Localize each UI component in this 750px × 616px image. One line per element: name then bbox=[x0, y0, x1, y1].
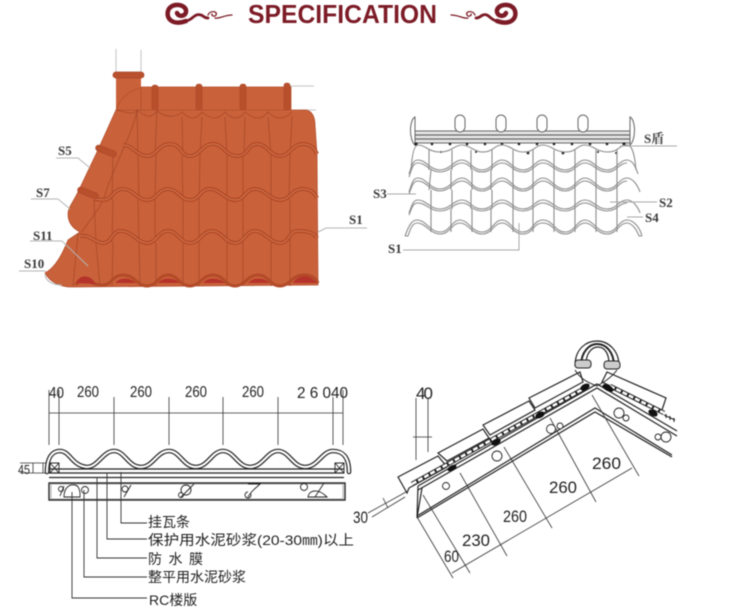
dimension lines bbox=[20, 390, 343, 473]
callout: S shield: S盾 bbox=[644, 131, 664, 146]
callout: S3: S3 bbox=[373, 186, 387, 201]
dimension labels: 260 bbox=[242, 384, 264, 401]
slab aggregate marks bbox=[58, 483, 327, 498]
hatched batten strip bbox=[412, 386, 675, 484]
callout: S5 bbox=[56, 143, 90, 168]
dimension labels: 260 bbox=[549, 478, 577, 497]
callout: S7: S7 bbox=[36, 185, 50, 200]
tile seams bbox=[73, 110, 292, 286]
dimension labels: 60 bbox=[444, 547, 459, 566]
dimension labels: 260 bbox=[185, 384, 207, 401]
dimension labels: 260 bbox=[503, 507, 527, 526]
material legend: 整平用水泥砂浆 bbox=[148, 569, 246, 585]
icon: right cloud swirl bbox=[451, 5, 515, 23]
material legend bbox=[148, 514, 354, 608]
slab aggregate marks bbox=[442, 408, 671, 490]
callout: S5: S5 bbox=[58, 143, 72, 158]
dimension labels: 260 bbox=[77, 384, 99, 401]
callout: S1: S1 bbox=[388, 241, 402, 256]
eave scallops bbox=[76, 276, 317, 284]
roof slab layers bbox=[49, 469, 345, 500]
roof tile body bbox=[45, 110, 318, 287]
panel: cross section with dimensions bbox=[18, 384, 354, 608]
callout: S shield bbox=[620, 131, 677, 146]
callout: S1 bbox=[318, 212, 367, 232]
callout: S4: S4 bbox=[645, 210, 659, 225]
callout: S10 bbox=[19, 256, 62, 285]
material legend: 保护用水泥砂浆(20-30㎜)以上 bbox=[148, 532, 354, 548]
panel: line drawing of tile layout bbox=[373, 115, 677, 256]
callout: S2: S2 bbox=[659, 195, 673, 210]
dimension labels: 30 bbox=[353, 508, 368, 527]
roof slab lines bbox=[417, 384, 677, 518]
leader lines bbox=[72, 472, 147, 598]
battens bbox=[50, 463, 344, 473]
callout: S11: S11 bbox=[33, 228, 53, 243]
dimension labels: 230 bbox=[462, 531, 490, 550]
dimension labels: 45 bbox=[18, 462, 30, 477]
dimension lines bbox=[368, 395, 639, 578]
callout: S7 bbox=[31, 185, 70, 209]
callout: S2 bbox=[610, 195, 673, 210]
chimney and ridge bbox=[113, 72, 291, 111]
ridge batten header bbox=[410, 115, 634, 145]
header: specification title bbox=[168, 0, 515, 29]
mortar blobs bbox=[446, 382, 659, 473]
dimension labels: 40 bbox=[416, 384, 433, 403]
material legend: RC楼版 bbox=[149, 592, 197, 608]
dimension labels: 260 bbox=[592, 454, 621, 473]
callout: S10: S10 bbox=[24, 256, 44, 271]
material legend: 挂瓦条 bbox=[148, 514, 190, 530]
dimension labels: 260 bbox=[130, 384, 152, 401]
icon: left cloud swirl bbox=[168, 5, 232, 23]
tile outlines bbox=[405, 145, 642, 236]
callout: S3 bbox=[373, 186, 416, 201]
guide lines above roof bbox=[116, 49, 316, 110]
dimension labels: 2 6 040 bbox=[297, 385, 348, 402]
callout: S4 bbox=[627, 210, 659, 225]
side verge straps bbox=[77, 144, 117, 200]
material legend: 防 水 膜 bbox=[148, 551, 203, 567]
nail dots bbox=[414, 142, 626, 154]
callout: S1 bbox=[388, 223, 519, 256]
tile profile bbox=[47, 451, 349, 472]
dimension labels bbox=[18, 384, 348, 477]
wave highlights bbox=[80, 144, 317, 243]
ridge tile bbox=[575, 341, 620, 386]
panel: coloured roof illustration bbox=[19, 49, 367, 287]
dimension labels: 40 bbox=[49, 385, 64, 402]
callout: S11 bbox=[30, 228, 88, 266]
callout: S1: S1 bbox=[349, 212, 363, 227]
panel: ridge section with dimensions bbox=[353, 341, 677, 578]
tile course waves bbox=[76, 144, 318, 286]
tiles bbox=[398, 372, 666, 493]
dimension labels bbox=[353, 384, 621, 566]
